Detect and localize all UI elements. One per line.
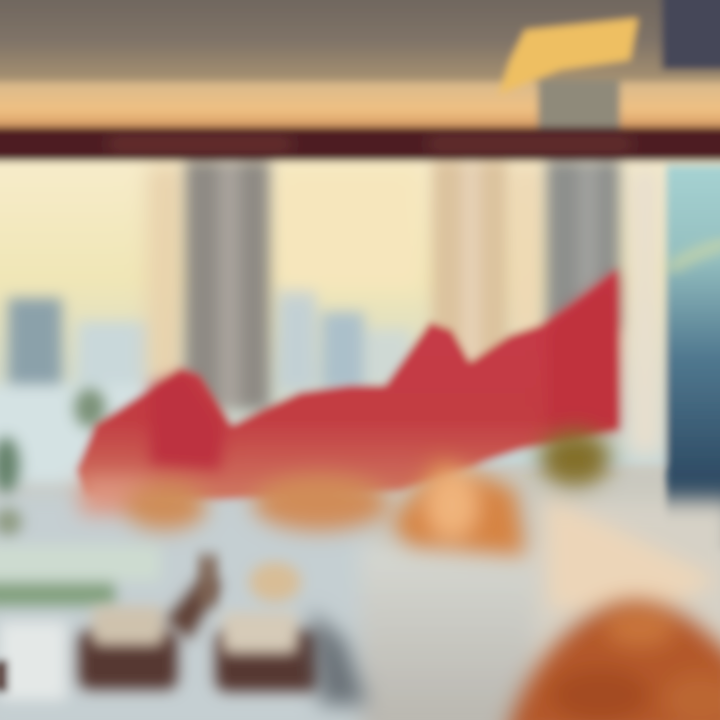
ceiling: [0, 0, 720, 90]
red area chart: [76, 268, 620, 500]
foreground orange armchair: [505, 600, 720, 720]
ceiling glow band: [0, 18, 720, 132]
header beam: [0, 127, 720, 161]
window sky: [0, 155, 720, 465]
lower wall and floor: [0, 490, 720, 720]
lounge seating: [0, 555, 368, 705]
columns: [185, 160, 620, 410]
pale window frames: [148, 165, 662, 455]
right side city view: [666, 165, 720, 550]
left plants and table: [0, 388, 160, 700]
orange cushions and planter: [80, 430, 611, 556]
city skyline: [0, 285, 410, 485]
